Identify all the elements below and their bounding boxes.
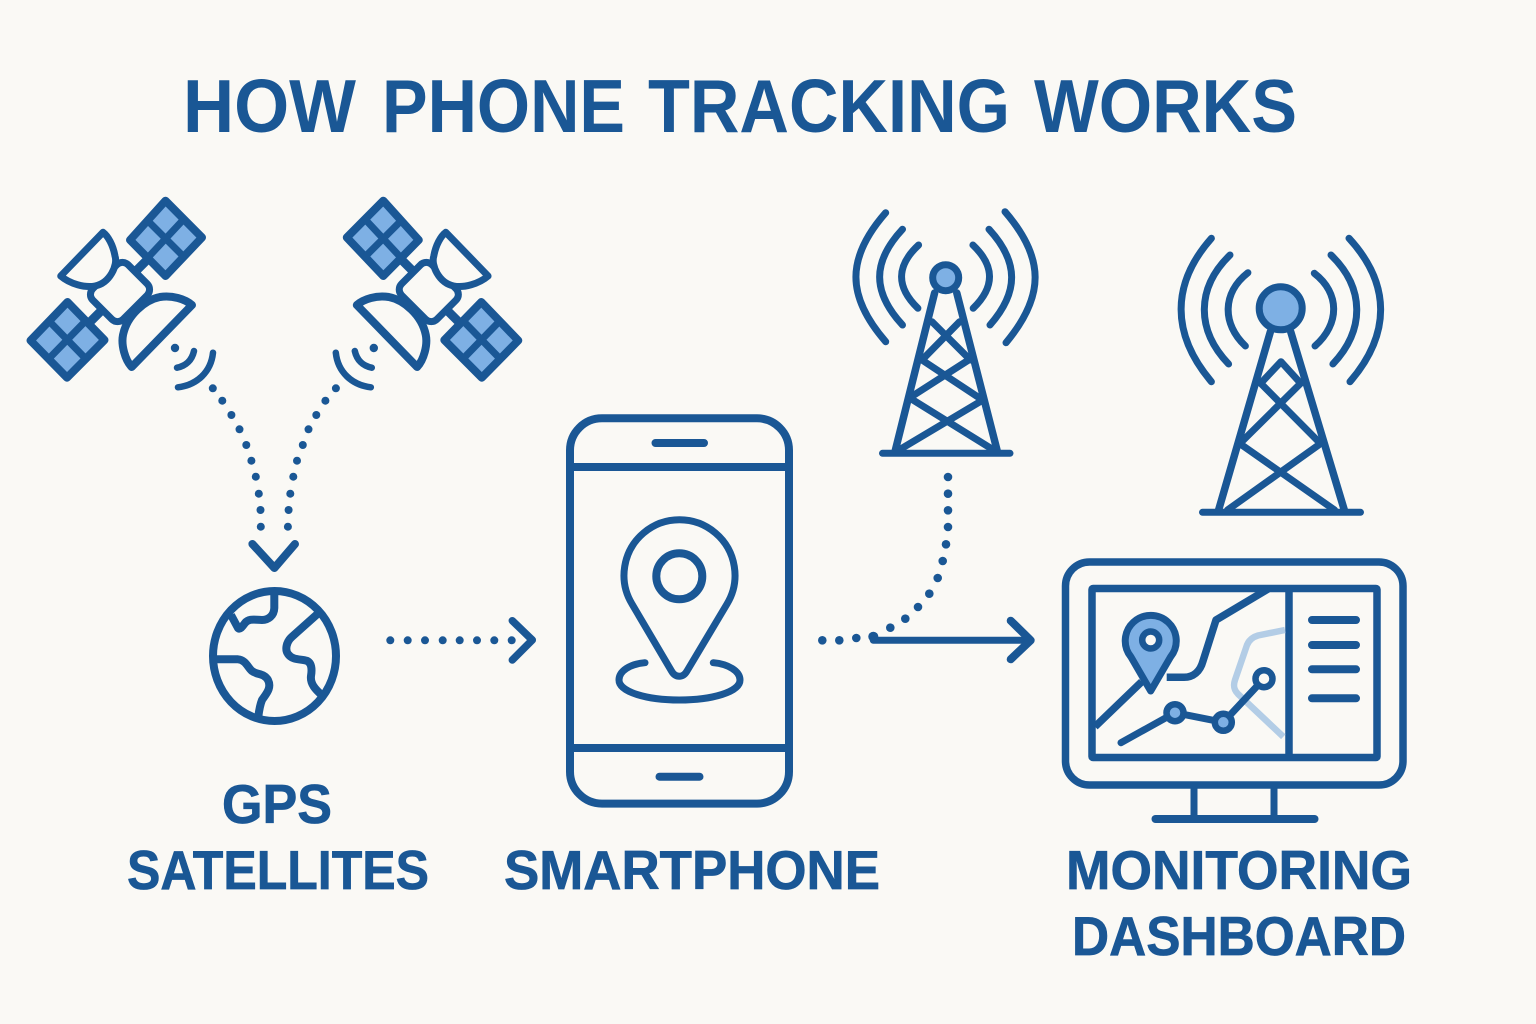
map roads [1095, 589, 1268, 727]
icon: smartphone with location pin [570, 418, 789, 804]
icon: small cell tower [856, 212, 1035, 453]
label: GPS Satellites: SATELLITES [127, 839, 429, 901]
title: PHONE [382, 64, 625, 148]
map location pin [1125, 615, 1176, 691]
label: Monitoring Dashboard: DASHBOARD [1072, 905, 1406, 967]
label: Monitoring Dashboard [1066, 839, 1412, 967]
title [183, 64, 1297, 148]
label: GPS Satellites [127, 773, 429, 901]
label: Monitoring Dashboard: MONITORING [1066, 839, 1412, 901]
label: GPS Satellites: GPS [222, 773, 332, 835]
arrow: Earth to smartphone [386, 621, 532, 660]
icon: right GPS satellite [336, 201, 518, 387]
chart line with markers [1121, 679, 1264, 743]
map route, faded [1234, 630, 1285, 737]
icon: large cell tower [1181, 238, 1381, 512]
icon: Earth globe [213, 591, 336, 721]
icon: monitoring dashboard monitor [1066, 562, 1403, 819]
title: HOW [183, 64, 356, 148]
title: TRACKING [648, 64, 1010, 148]
label: Smartphone: SMARTPHONE [504, 839, 880, 901]
arrow: dotted signals from satellites to Earth [209, 384, 340, 568]
arrow: tower and smartphone to dashboard [818, 473, 1031, 659]
dashboard list lines [1312, 620, 1356, 698]
title: WORKS [1034, 64, 1297, 148]
icon: left GPS satellite [30, 201, 213, 387]
